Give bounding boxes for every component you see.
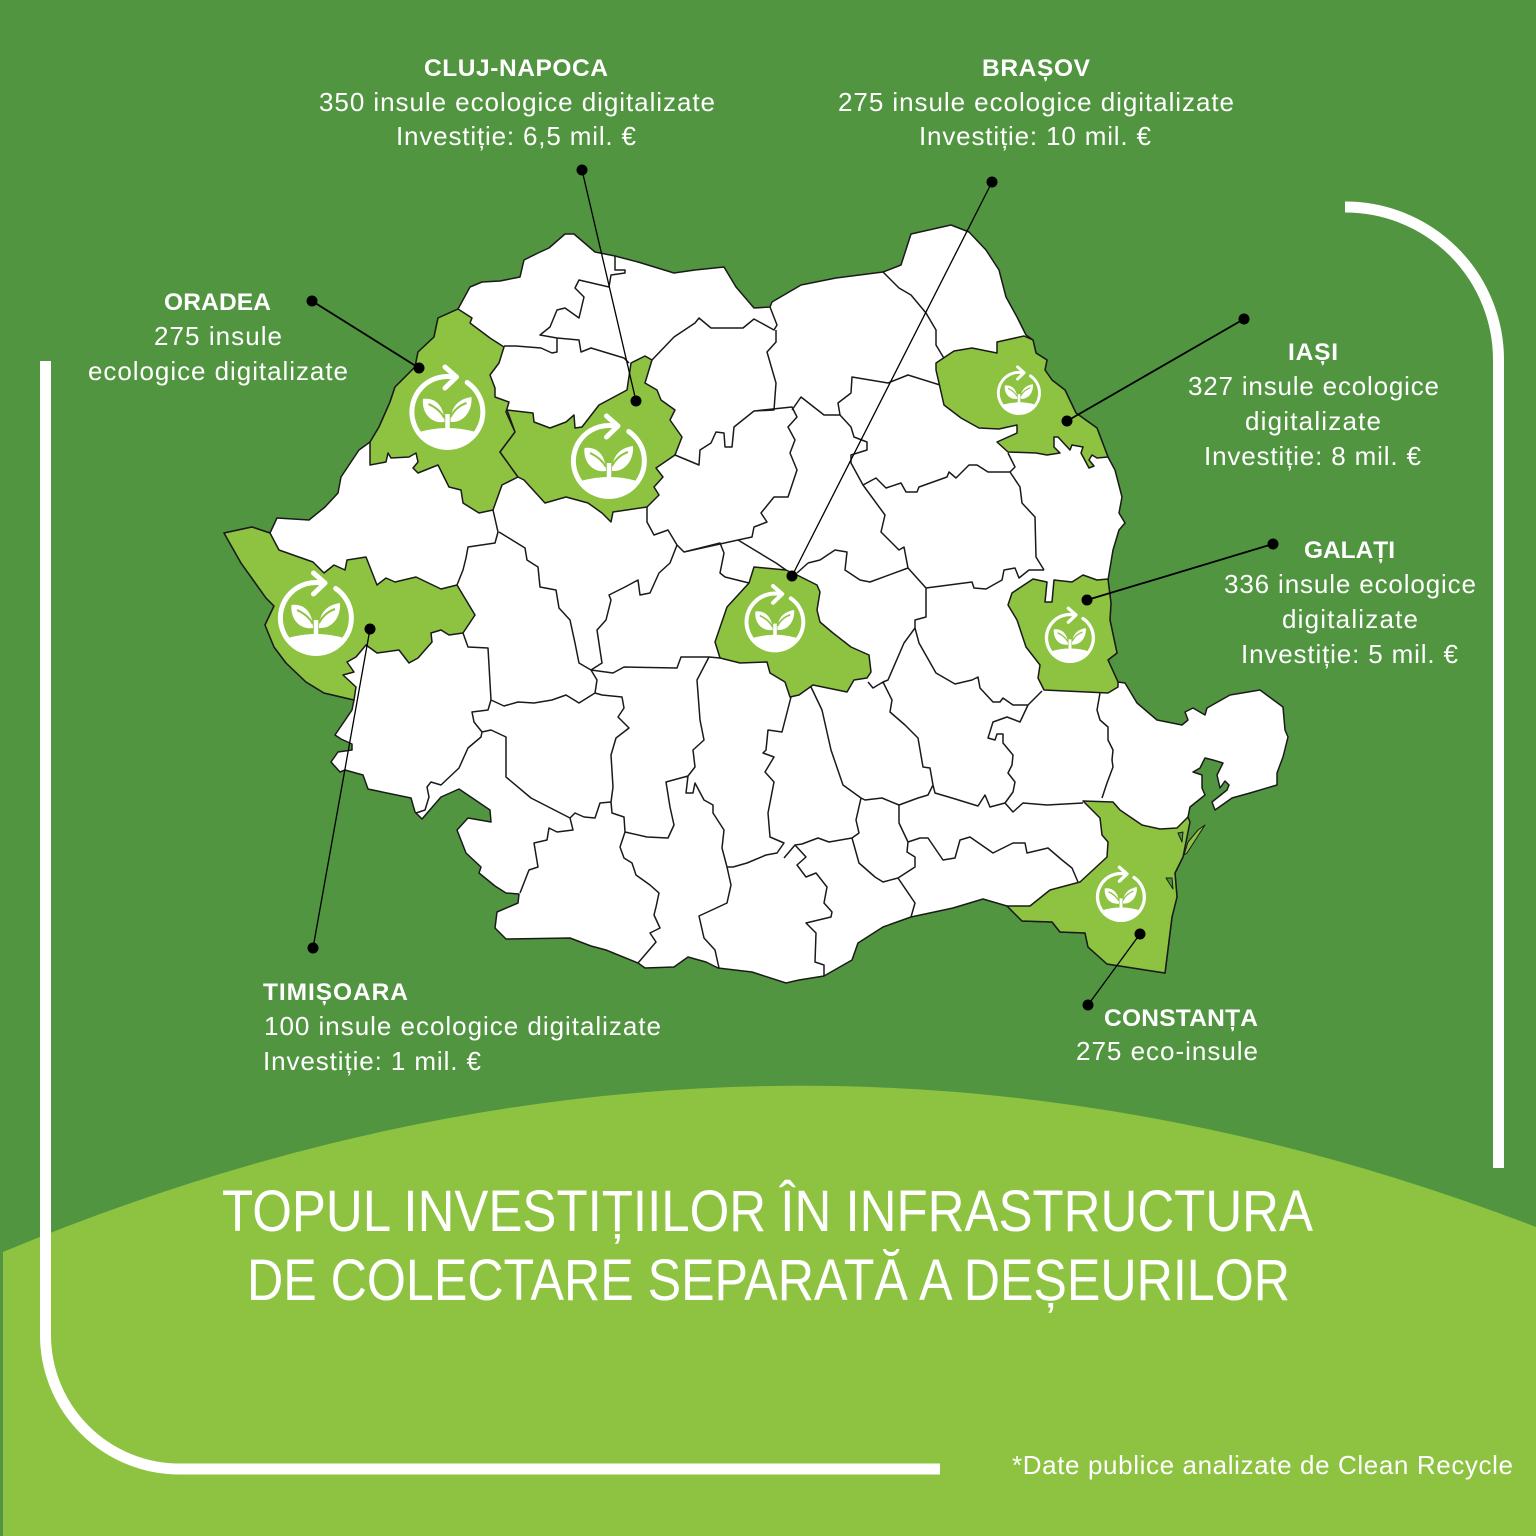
text block: Cluj-Napoca: CLUJ-NAPOCA xyxy=(424,55,608,82)
text block: Galați: 336 insule ecologice xyxy=(1224,569,1476,599)
text block: Cluj-Napoca xyxy=(319,55,715,151)
white frame right bracket xyxy=(1345,207,1498,1168)
text block: Constanța: CONSTANȚA xyxy=(1104,1005,1258,1032)
text block: Brașov: BRAȘOV xyxy=(982,55,1091,82)
map of Romania xyxy=(224,225,1288,983)
text block: Timișoara: TIMIȘOARA xyxy=(263,979,408,1006)
text block: Galați: GALAȚI xyxy=(1304,537,1395,564)
county: Brașov xyxy=(715,567,871,697)
text block: Timișoara: 100 insule ecologice digitalizate xyxy=(264,1011,661,1041)
text block: Galați: Investiție: 5 mil. € xyxy=(1241,639,1459,669)
text block: Oradea: ORADEA xyxy=(164,289,271,316)
county: Iași xyxy=(936,336,1108,468)
text block: Galați xyxy=(1224,537,1476,669)
leader: Oradea xyxy=(306,296,424,374)
county: Cluj xyxy=(500,356,682,522)
green hill footer panel xyxy=(3,1086,1536,1536)
text block: Iași: 327 insule ecologice xyxy=(1188,371,1439,401)
county: Galați xyxy=(1008,575,1118,693)
text block: Oradea: ecologice digitalizate xyxy=(88,356,348,386)
text block: Cluj-Napoca: 350 insule ecologice digitalizate xyxy=(319,87,715,117)
text block: Galați: digitalizate xyxy=(1282,604,1418,634)
text block: Timișoara xyxy=(263,979,661,1076)
text block: Iași: digitalizate xyxy=(1245,406,1381,436)
leader: Brașov xyxy=(786,176,998,582)
county: Bihor (Oradea) xyxy=(370,309,518,513)
leader: Cluj-Napoca xyxy=(576,164,642,406)
county: Timiș (Timișoara) xyxy=(224,527,475,700)
icon: recycle plant Timișoara xyxy=(280,573,351,653)
icon: recycle plant Iași xyxy=(998,367,1040,414)
leader: Timișoara xyxy=(308,624,376,954)
leader: Iași xyxy=(1062,314,1250,426)
text block: Iași: IAȘI xyxy=(1288,339,1338,366)
icon: recycle plant Cluj xyxy=(573,416,644,496)
title xyxy=(222,1179,1313,1313)
text block: Brașov: Investiție: 10 mil. € xyxy=(919,121,1152,151)
icon: recycle plant Brașov xyxy=(747,586,803,650)
county: Constanța xyxy=(1007,801,1190,973)
icon: recycle plant Oradea xyxy=(412,367,483,447)
icon: recycle plant Galați xyxy=(1046,608,1093,661)
lagoon details xyxy=(1166,832,1183,889)
text block: Brașov xyxy=(838,55,1234,151)
footnote: *Date publice analizate de Clean Recycle xyxy=(1012,1450,1513,1480)
leader: Constanța xyxy=(1082,928,1146,1010)
text block: Iași xyxy=(1188,339,1439,471)
text block: Cluj-Napoca: Investiție: 6,5 mil. € xyxy=(396,121,637,151)
text block: Timișoara: Investiție: 1 mil. € xyxy=(263,1046,482,1076)
white frame left bracket xyxy=(46,361,940,1469)
text block: Constanța: 275 eco-insule xyxy=(1076,1036,1258,1066)
leader: Galați xyxy=(1082,538,1278,606)
text block: Oradea: 275 insule xyxy=(154,321,282,351)
title: TOPUL INVESTIȚIILOR ÎN INFRASTRUCTURA xyxy=(222,1179,1313,1244)
country outline xyxy=(224,225,1288,983)
text block: Iași: Investiție: 8 mil. € xyxy=(1204,441,1422,471)
county borders xyxy=(416,256,1113,976)
text block: Brașov: 275 insule ecologice digitalizate xyxy=(838,87,1234,117)
icon: recycle plant Constanța xyxy=(1097,867,1144,920)
text block: Constanța xyxy=(1076,1005,1258,1066)
title: DE COLECTARE SEPARATĂ A DEȘEURILOR xyxy=(247,1248,1290,1313)
text block: Oradea xyxy=(88,289,348,386)
spit island xyxy=(1184,825,1205,855)
